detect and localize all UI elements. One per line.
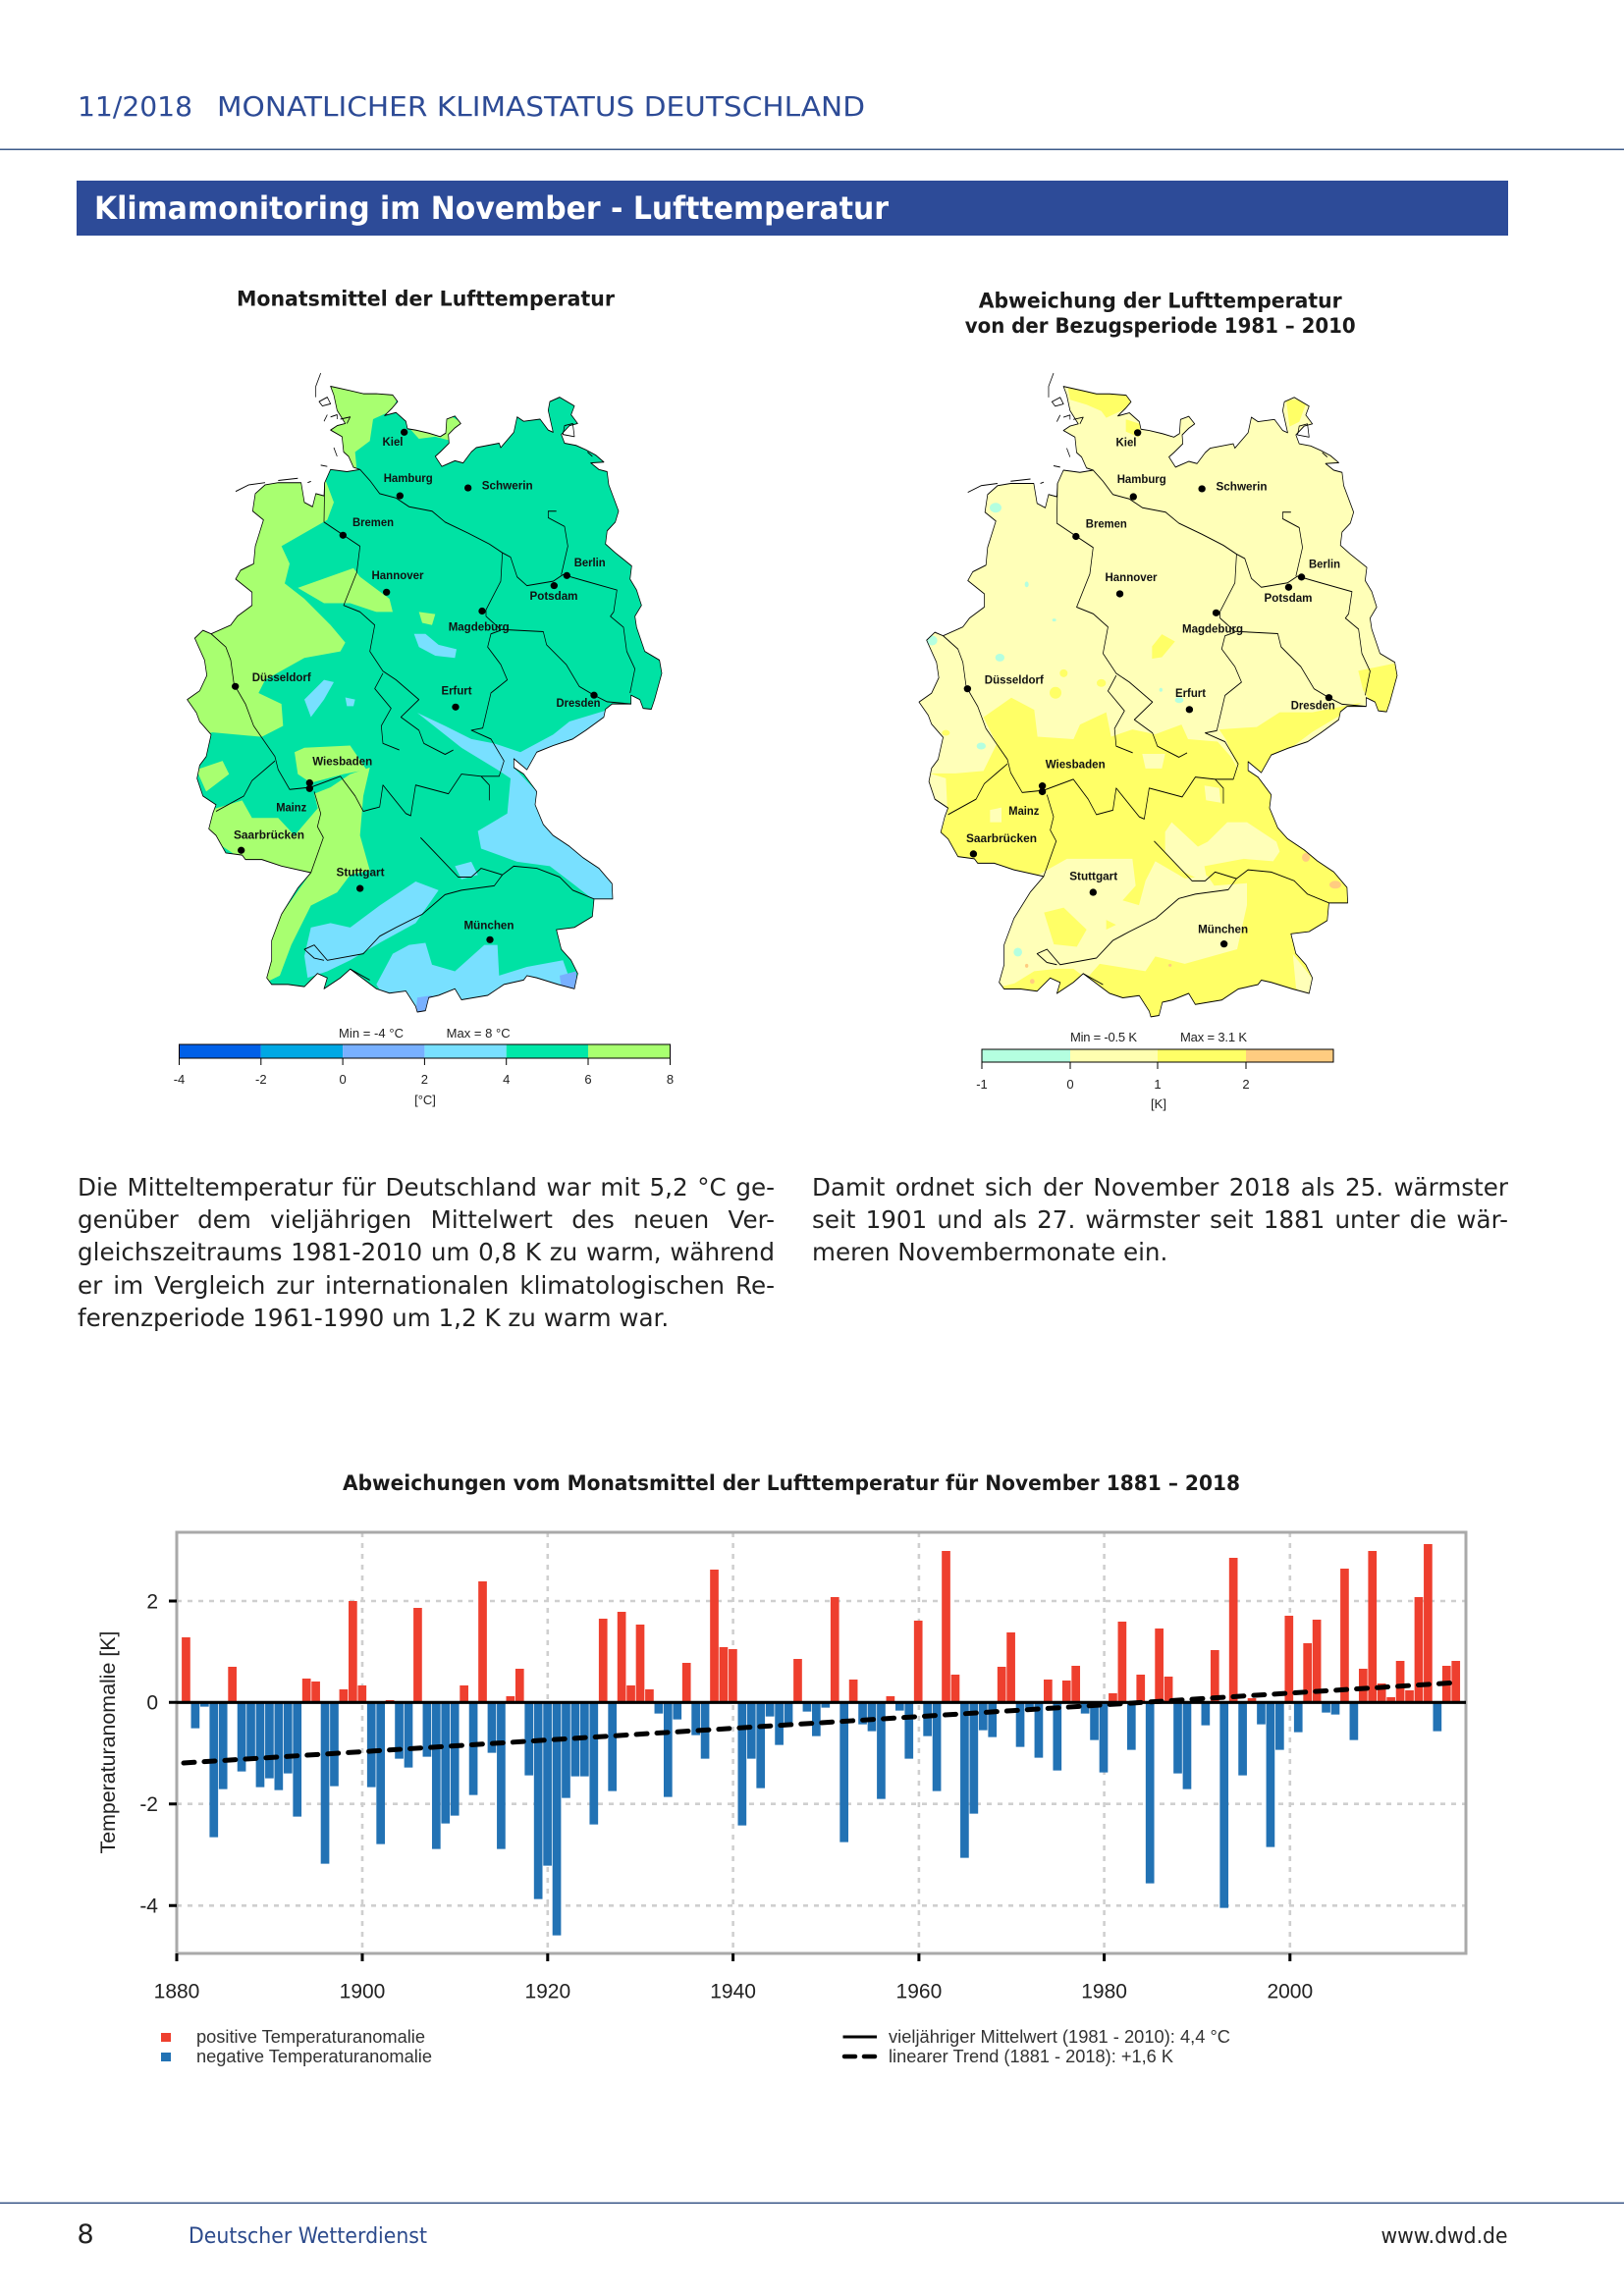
legend: temperature scale: 0 <box>339 1072 347 1087</box>
text block: right column: seit 1901 und als 27. wärmster seit 1881 unter die wär- <box>812 1205 1508 1234</box>
linear trend line <box>184 1682 1458 1763</box>
city labels: Potsdam <box>530 589 577 603</box>
bars: positive anomalies <box>182 1544 1460 1702</box>
x axis labels: 1880 <box>154 1981 199 2002</box>
city labels: Wiesbaden <box>312 755 372 769</box>
city labels: München <box>1198 923 1248 936</box>
heading: right map: von der Bezugsperiode 1981 – 2010 <box>965 314 1356 339</box>
city dots <box>964 429 1332 947</box>
city labels: Stuttgart <box>1069 870 1117 883</box>
y axis labels <box>139 1590 158 1918</box>
heading: right map <box>965 289 1356 339</box>
header title: MONATLICHER KLIMASTATUS DEUTSCHLAND <box>217 91 865 123</box>
chart legend: vieljähriger Mittelwert (1981 - 2010): 4,4 °C <box>889 2027 1230 2047</box>
legend: temperature scale: Max = 8 °C <box>447 1026 511 1041</box>
legend: deviation scale <box>976 1030 1333 1111</box>
city labels: Potsdam <box>1265 591 1312 605</box>
city labels: Berlin <box>1309 558 1340 571</box>
y axis labels: 2 <box>146 1590 158 1614</box>
city labels <box>234 435 606 933</box>
city labels: Erfurt <box>442 684 471 698</box>
city labels: München <box>463 919 514 933</box>
city labels: Schwerin <box>482 479 533 493</box>
city labels: Bremen <box>352 515 394 529</box>
bar chart: temperature anomalies 1881-2018 <box>97 1532 1466 2002</box>
city labels: Hannover <box>371 568 424 582</box>
heading: right map: Abweichung der Lufttemperatur <box>979 289 1342 313</box>
bars: negative anomalies <box>191 1702 1441 1936</box>
city labels: Dresden <box>1291 699 1335 713</box>
city labels <box>966 436 1340 936</box>
y axis labels: 0 <box>146 1692 158 1714</box>
section heading banner: Klimamonitoring im November - Lufttemperatur <box>94 189 889 227</box>
city labels: Saarbrücken <box>966 831 1037 845</box>
city labels: Bremen <box>1086 516 1127 530</box>
x axis labels: 1960 <box>896 1981 942 2002</box>
city labels: Düsseldorf <box>985 673 1045 687</box>
y axis labels: -2 <box>139 1793 158 1816</box>
legend: temperature scale: 2 <box>421 1072 428 1087</box>
legend: deviation scale: [K] <box>1151 1096 1166 1111</box>
text block: left column: gleichszeitraums 1981-2010 um 0,8 K zu warm, während <box>78 1238 775 1266</box>
city labels: Kiel <box>383 435 403 449</box>
city labels: Erfurt <box>1175 686 1206 700</box>
x axis labels: 1920 <box>524 1981 570 2002</box>
footer: website: www.dwd.de <box>1380 2224 1508 2249</box>
city labels: Dresden <box>556 696 601 710</box>
city labels: Magdeburg <box>1182 622 1243 636</box>
legend: temperature scale: -4 <box>174 1072 185 1087</box>
legend: temperature scale: [°C] <box>414 1093 436 1107</box>
city labels: Mainz <box>1008 804 1039 818</box>
legend: deviation scale: Max = 3.1 K <box>1180 1030 1247 1044</box>
legend: temperature scale: 4 <box>503 1072 510 1087</box>
x axis labels <box>154 1981 1313 2002</box>
y axis title: Temperaturanomalie [K] <box>97 1630 120 1854</box>
text block: right column <box>812 1173 1508 1266</box>
footer: page number: 8 <box>77 2219 94 2250</box>
city labels: Saarbrücken <box>234 828 304 842</box>
text block: right column: Damit ordnet sich der November 2018 als 25. wärmster <box>812 1173 1508 1201</box>
city labels: Mainz <box>276 801 306 815</box>
text block: left column: er im Vergleich zur internationalen klimatologischen Re- <box>78 1271 775 1300</box>
x axis labels: 1900 <box>340 1981 385 2002</box>
footer: publisher: Deutscher Wetterdienst <box>189 2224 427 2249</box>
chart legend: negative Temperaturanomalie <box>196 2047 432 2066</box>
axis ticks <box>169 1601 1290 1961</box>
y axis labels: -4 <box>139 1895 158 1918</box>
x axis labels: 1940 <box>710 1981 756 2002</box>
chart legend: linearer Trend (1881 - 2018): +1,6 K <box>889 2047 1173 2066</box>
legend: deviation scale: 2 <box>1242 1077 1250 1092</box>
legend: deviation scale: 0 <box>1066 1077 1074 1092</box>
city labels: Düsseldorf <box>252 670 312 684</box>
chart legend: positive Temperaturanomalie <box>196 2027 425 2047</box>
legend: deviation scale: -1 <box>976 1077 988 1092</box>
chart title: Abweichungen vom Monatsmittel der Lufttemperatur für November 1881 – 2018 <box>343 1471 1240 1495</box>
text block: right column: meren Novembermonate ein. <box>812 1238 1167 1266</box>
city labels: Hannover <box>1106 570 1158 584</box>
legend: deviation scale: 1 <box>1154 1077 1162 1092</box>
legend: temperature scale <box>174 1026 674 1107</box>
text block: left column: genüber dem vieljährigen Mittelwert des neuen Ver- <box>78 1205 775 1234</box>
city dots <box>232 429 598 943</box>
chart legend <box>161 2027 1230 2066</box>
city labels: Hamburg <box>1117 472 1166 486</box>
legend: temperature scale: 6 <box>584 1072 592 1087</box>
x axis labels: 2000 <box>1267 1981 1313 2002</box>
city labels: Stuttgart <box>336 866 385 880</box>
text block: left column <box>78 1173 775 1332</box>
city labels: Wiesbaden <box>1046 758 1106 772</box>
legend: temperature scale: Min = -4 °C <box>339 1026 404 1041</box>
header title: 11/2018 <box>78 91 192 123</box>
city labels: Schwerin <box>1216 479 1267 493</box>
legend: deviation scale: Min = -0.5 K <box>1070 1030 1137 1044</box>
text block: left column: Die Mitteltemperatur für Deutschland war mit 5,2 °C ge- <box>78 1173 775 1201</box>
text block: left column: ferenzperiode 1961-1990 um 1,2 K zu warm war. <box>78 1304 669 1332</box>
x axis labels: 1980 <box>1081 1981 1127 2002</box>
legend: temperature scale: 8 <box>667 1072 674 1087</box>
map: temperature deviation <box>919 373 1398 1017</box>
city labels: Kiel <box>1115 436 1137 450</box>
section heading banner <box>77 181 1508 236</box>
city labels: Berlin <box>574 556 606 569</box>
heading: left map: Monatsmittel der Lufttemperatur <box>237 287 615 312</box>
map: mean air temperature <box>187 373 662 1013</box>
city labels: Hamburg <box>384 471 433 485</box>
legend: temperature scale: -2 <box>255 1072 267 1087</box>
city labels: Magdeburg <box>449 620 510 634</box>
